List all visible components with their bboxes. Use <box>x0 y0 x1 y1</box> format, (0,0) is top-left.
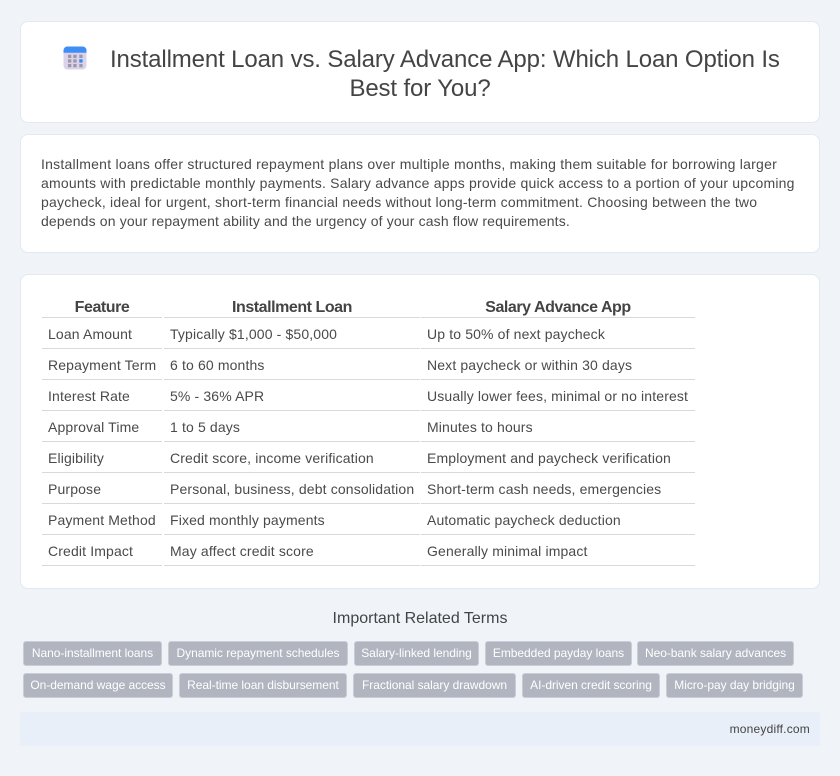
related term tags <box>23 641 803 698</box>
row: payment method: Payment Method <box>48 512 156 528</box>
row: interest rate: Interest Rate <box>48 388 130 404</box>
tag <box>353 673 516 698</box>
title: Best for You? <box>349 75 491 102</box>
row: approval time: 1 to 5 days <box>170 419 240 435</box>
tag <box>637 641 794 666</box>
row: credit impact <box>42 543 695 566</box>
row: interest rate: 5% - 36% APR <box>170 388 264 404</box>
tag <box>23 673 173 698</box>
tag <box>23 641 162 666</box>
tag <box>354 641 479 666</box>
panel: intro text <box>20 134 820 253</box>
row: payment method: Automatic paycheck deduction <box>427 512 621 528</box>
table header: Salary Advance App <box>485 299 631 316</box>
intro paragraph <box>41 156 795 229</box>
tag: Real-time loan disbursement <box>187 678 339 692</box>
footer <box>20 712 820 746</box>
tag: Nano-installment loans <box>32 646 153 660</box>
row: repayment term: Repayment Term <box>48 357 156 373</box>
table header: Feature <box>75 299 129 316</box>
row: eligibility: Eligibility <box>48 450 104 466</box>
row: payment method: Fixed monthly payments <box>170 512 325 528</box>
tag <box>666 673 803 698</box>
table header: Installment Loan <box>232 299 352 316</box>
tag: On-demand wage access <box>30 678 166 692</box>
tag: Embedded payday loans <box>493 646 624 660</box>
row: credit impact: Credit Impact <box>48 543 133 559</box>
title: Installment Loan vs. Salary Advance App: Which Loan Option Is <box>110 46 780 73</box>
tag <box>168 641 348 666</box>
row: repayment term <box>42 357 695 380</box>
panel: title card <box>20 21 820 123</box>
row: eligibility: Employment and paycheck verification <box>427 450 671 466</box>
row: approval time: Minutes to hours <box>427 419 533 435</box>
row: loan amount: Up to 50% of next paycheck <box>427 326 605 342</box>
intro paragraph: paycheck, ideal for urgent, short-term financial needs without long-term commitment. Choosing between the two <box>41 194 757 210</box>
row: loan amount: Typically $1,000 - $50,000 <box>170 326 337 342</box>
tag: Fractional salary drawdown <box>362 678 507 692</box>
tag: Micro-pay day bridging <box>674 678 795 692</box>
row: loan amount <box>42 326 695 349</box>
heading: related terms: Important Related Terms <box>333 610 507 627</box>
title <box>110 46 780 102</box>
row: eligibility: Credit score, income verification <box>170 450 374 466</box>
row: purpose <box>42 481 695 504</box>
intro paragraph: depends on your repayment ability and the urgency of your cash flow requirements. <box>41 213 570 229</box>
row: approval time: Approval Time <box>48 419 139 435</box>
tag: AI-driven credit scoring <box>530 678 652 692</box>
row: purpose: Personal, business, debt consolidation <box>170 481 414 497</box>
row: interest rate <box>42 388 695 411</box>
row: payment method <box>42 512 695 535</box>
tag: Neo-bank salary advances <box>645 646 786 660</box>
row: repayment term: Next paycheck or within 30 days <box>427 357 632 373</box>
icon: calendar <box>64 46 86 70</box>
intro paragraph: Installment loans offer structured repayment plans over multiple months, making them suitable for borrowing larger <box>41 156 777 172</box>
tag: Salary-linked lending <box>361 646 472 660</box>
tag <box>179 673 347 698</box>
row: approval time <box>42 419 695 442</box>
panel: comparison table <box>20 274 820 589</box>
row: loan amount: Loan Amount <box>48 326 132 342</box>
row: eligibility <box>42 450 695 473</box>
row: interest rate: Usually lower fees, minimal or no interest <box>427 388 688 404</box>
row: credit impact: May affect credit score <box>170 543 314 559</box>
row: purpose: Purpose <box>48 481 101 497</box>
tag <box>522 673 660 698</box>
tag: Dynamic repayment schedules <box>176 646 340 660</box>
tag <box>485 641 632 666</box>
row: purpose: Short-term cash needs, emergencies <box>427 481 661 497</box>
footer source: moneydiff.com <box>730 722 810 736</box>
row: repayment term: 6 to 60 months <box>170 357 265 373</box>
table header <box>42 299 695 318</box>
row: credit impact: Generally minimal impact <box>427 543 588 559</box>
intro paragraph: amounts with predictable monthly payments. Salary advance apps provide quick access to a portion of your upcoming <box>41 175 795 191</box>
